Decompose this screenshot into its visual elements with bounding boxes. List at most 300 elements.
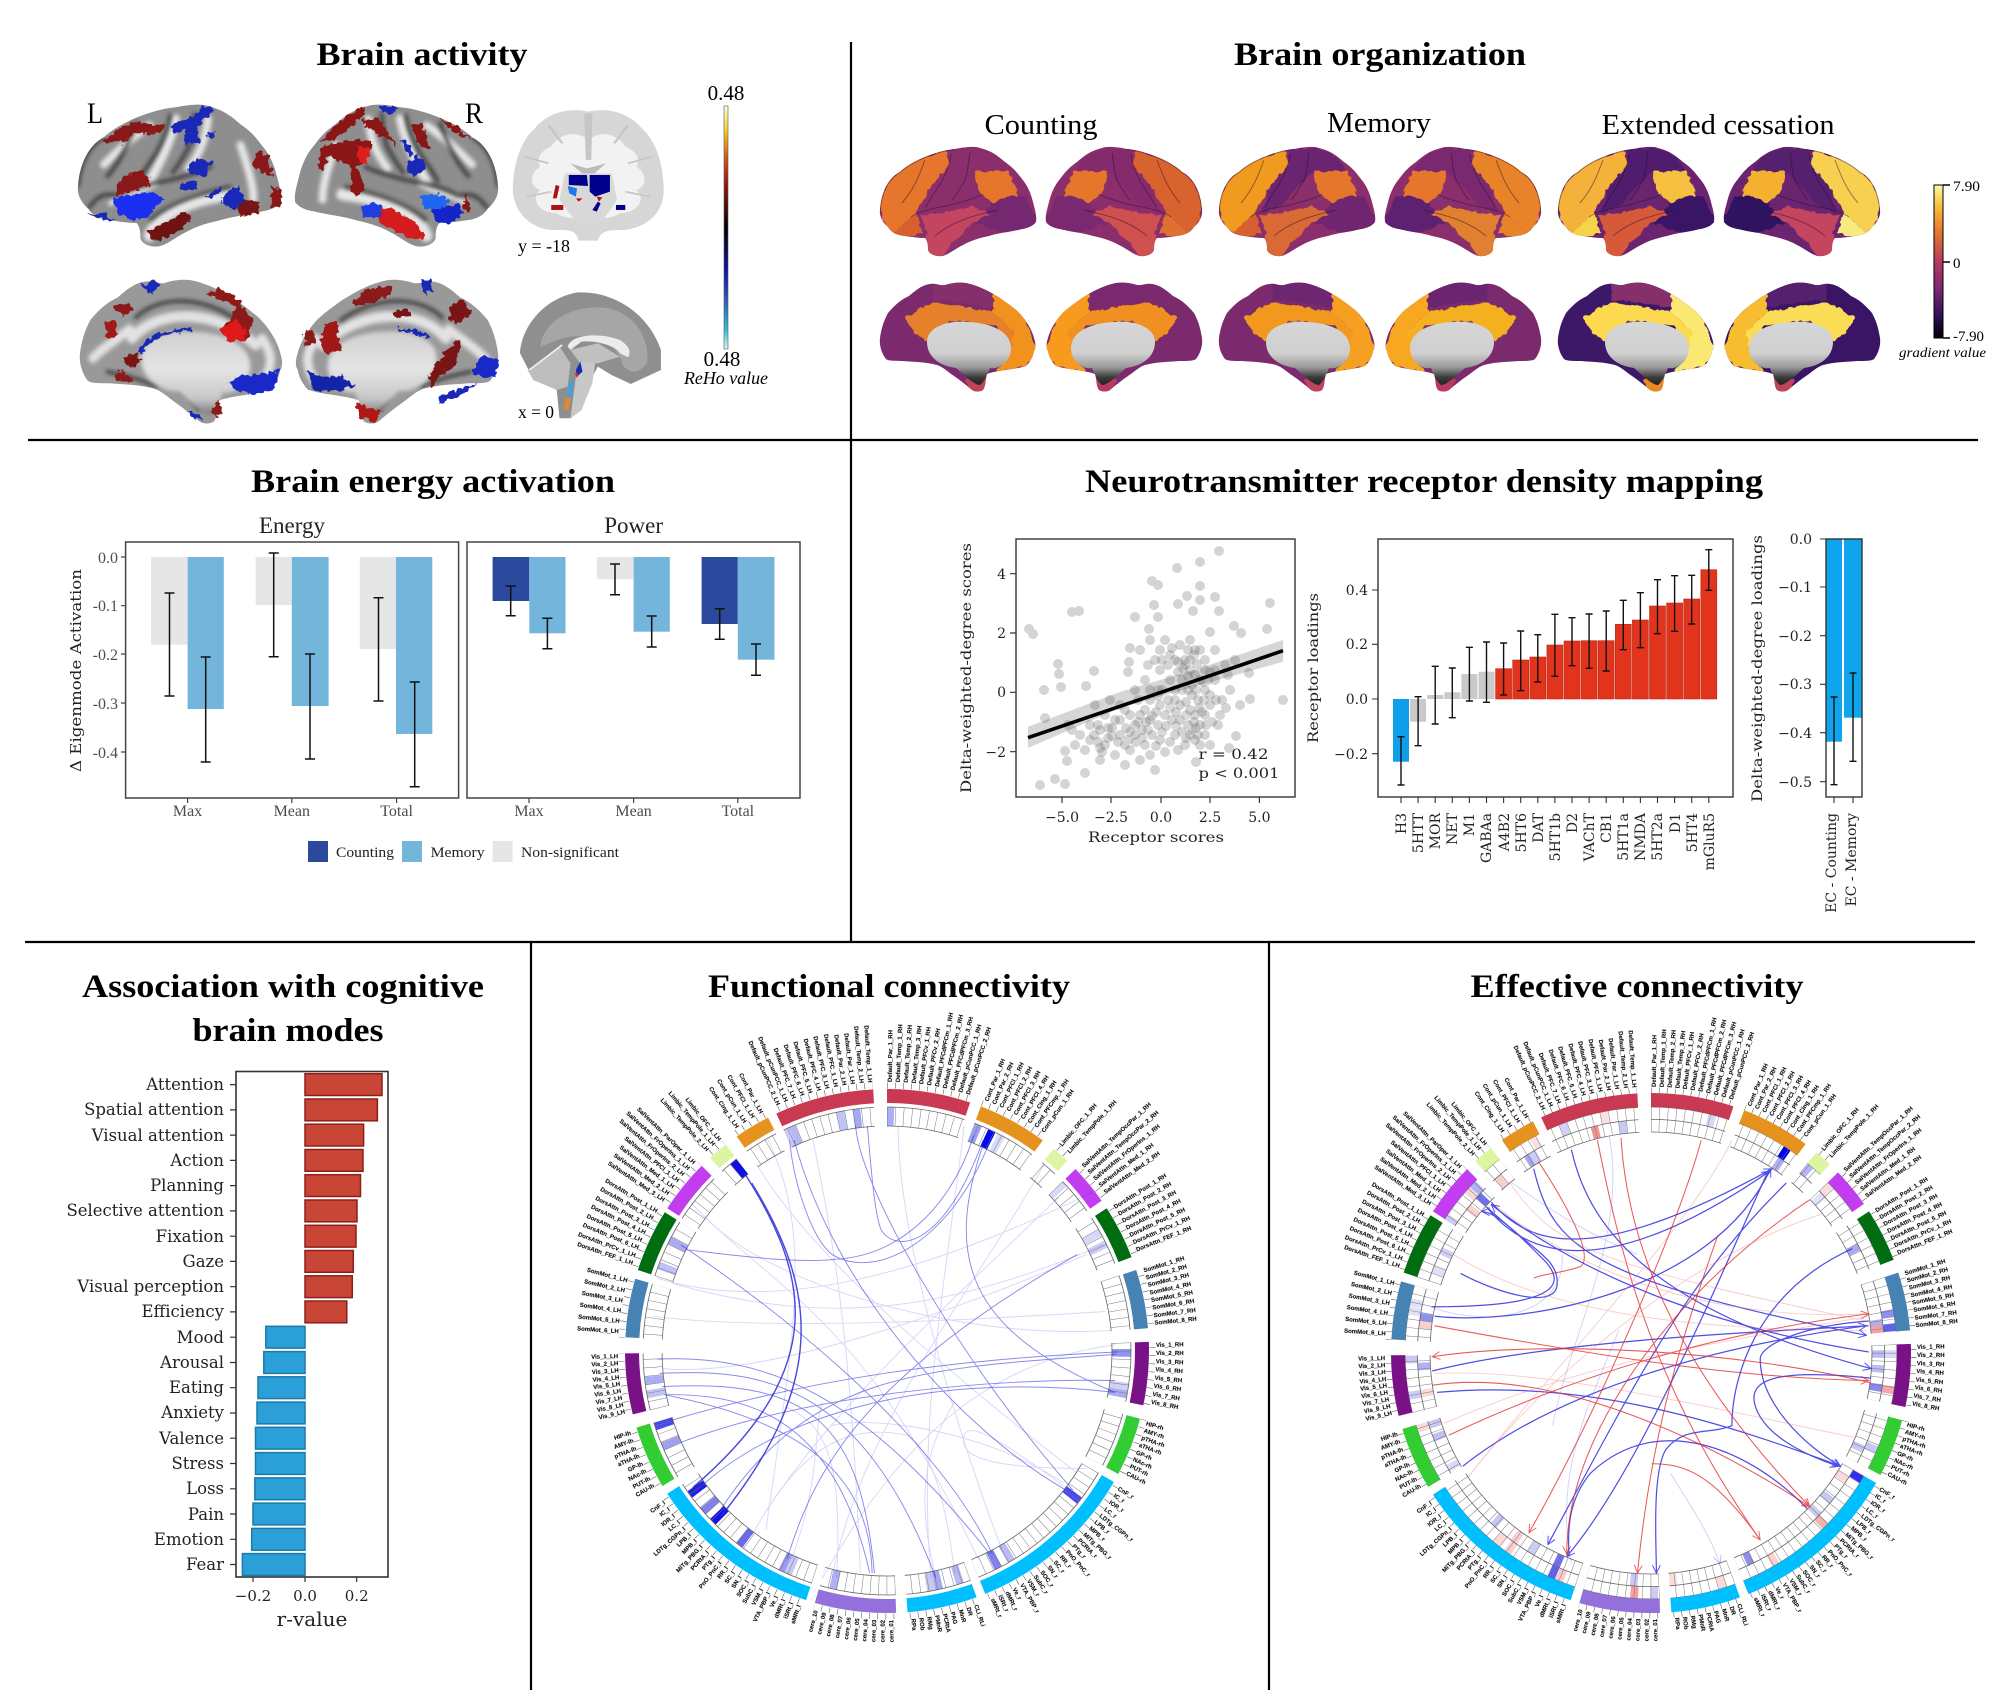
node labels right: PCRtA_r [1838,1538,1860,1560]
node labels left: Default_PFC_1_LH [822,1034,838,1088]
node labels left: Limbic_OFC_1_LH [1449,1102,1487,1147]
node labels left [576,1025,896,1642]
node labels left: iSRt_l [784,1601,795,1620]
node labels left: cere_05 [853,1618,861,1641]
node labels right: SalVentAttn_FrOperIns_1_RH [1854,1128,1923,1186]
node labels left: Cont_PFCl_1_LH [726,1074,755,1120]
node labels left: SOC_l [736,1580,751,1598]
legend: Memory [431,845,485,861]
node labels right: VSM_r [1025,1579,1040,1598]
node labels right: SomMot_3_RH [1147,1273,1190,1289]
node labels right: SomMot_4_RH [1149,1282,1192,1297]
chart: scatter plot: Delta-weighted-degree scores [959,543,975,793]
node labels left: Default_PFC_5_LH [1556,1046,1577,1099]
node labels left: NAc-lh [1395,1469,1415,1483]
node labels right: Vis_6_RH [1914,1385,1942,1395]
chart: receptor loadings bars: DAT [1531,812,1547,843]
node labels left: SomMot_6_LH [1344,1329,1386,1337]
node labels right: PUT-rh [1890,1465,1910,1479]
chart: receptor loadings bars: M1 [1462,813,1478,836]
node labels left: LDTg_CGPn_l [1419,1526,1454,1558]
node labels left: SalVentAttn_Med_2_LH [612,1153,670,1197]
node labels right: Vis_7_RH [1913,1393,1941,1404]
chart: energy: -0.2 [93,647,118,664]
chart: delta-weighted-degree loadings: EC - Memory [1844,813,1860,906]
node labels right: SalVentAttn_Med_1_RH [1860,1147,1917,1193]
node labels right: NAc-rh [1893,1458,1914,1472]
node labels left: Default_PFC_1_LH [1587,1039,1603,1093]
node labels left: SalVentAttn_ParOper_1_LH [635,1107,696,1166]
node labels right: AMY-rh [1904,1430,1926,1442]
node labels right: RR_r [1058,1555,1072,1570]
node labels left: DorsAttn_Post_5_LH [1352,1217,1409,1247]
chart: delta-weighted-degree loadings: −0.1 [1778,580,1812,596]
chart: scatter plot: 2.5 [1199,810,1221,826]
chart: r-value bars: Gaze [183,1252,224,1271]
node labels right: Vis_8_RH [1150,1400,1179,1411]
label: Extended cessation: Extended cessation [1602,110,1834,141]
chart: power: Mean [615,803,652,820]
node labels left: SC_l [1490,1570,1503,1585]
chart: receptor loadings bars: 0.2 [1346,637,1368,653]
node labels right: SalVentAttn_TempOccPar_1_RH [1843,1106,1915,1173]
panel: functional connectivity [526,969,1248,1696]
chart: energy: 0.0 [98,550,118,567]
node labels right: Default_pCunPCC_1_RH [958,1024,983,1093]
node labels right: Vis_3_RH [1156,1359,1183,1366]
chart: energy: -0.4 [93,745,118,762]
node labels right: aTHA-rh [1899,1444,1924,1458]
node labels right: Default_Temp_2_RH [1667,1030,1678,1088]
node labels right: SomMot_2_RH [1906,1267,1949,1284]
node labels left: SalVentAttn_Med_1_LH [1384,1149,1441,1194]
node labels right: SomMot_4_RH [1910,1284,1953,1299]
chart: receptor loadings bars [1306,539,1733,870]
chart: r-value bars [66,1072,388,1631]
chart: r-value bars: Arousal [159,1353,224,1372]
node labels right: Default_PFCv_2_RH [1691,1033,1706,1091]
node labels right: Cont_PFCl_4_RH [1783,1079,1813,1125]
node labels left: Cont_pCun_1_LH [715,1079,747,1124]
node labels left: SalVentAttn_Med_1_LH [618,1145,675,1190]
node labels right: Default_PFCv_2_RH [927,1028,942,1086]
node labels left: cere_06 [1608,1615,1618,1639]
node labels right [1652,1017,1958,1633]
node labels left: cere_01 [1653,1618,1660,1641]
chart: scatter plot: 2 [997,626,1006,642]
node labels left: aTHA-lh [617,1454,641,1468]
node labels left: SomMot_2_LH [1350,1282,1392,1297]
node labels left: Default_PFC_5_LH [791,1041,813,1094]
chart: receptor loadings bars: CB1 [1599,813,1615,843]
chart: r-value bars: Valence [158,1429,224,1448]
node labels right: SomMot_6_RH [1152,1299,1195,1311]
node labels left: Cont_Cing_1_LH [707,1086,739,1130]
node labels left: Default_Temp_1_LH [862,1025,872,1083]
node labels right: SN_r [1045,1565,1059,1580]
node labels right: SubC_r [1794,1574,1811,1596]
chart: r-value bars: Spatial attention [84,1100,224,1119]
chart: r-value bars: 0.2 [345,1587,369,1605]
node labels left: MiTg_PBG_l [676,1544,705,1574]
node labels right: Default_Par_1_RH [1652,1035,1658,1087]
node labels right: LDTg_CGPn_r [1859,1514,1896,1544]
node labels right: PAG [949,1611,958,1625]
node labels left: VSM_l [751,1588,765,1607]
chart: receptor loadings bars: 5HT1a [1616,813,1632,861]
node labels right: Cont_Par_1_RH [985,1058,1007,1103]
node labels right: RPa [909,1619,916,1631]
chart: r-value bars: Fear [186,1555,224,1574]
node labels left: HIP-lh [614,1431,632,1442]
node labels right: RMg [925,1616,933,1630]
node labels left: SubC_l [1508,1583,1523,1604]
colorbar: ReHo: 0.48 [704,347,740,371]
node labels left: pTHA-lh [1381,1447,1405,1461]
node labels right: GP-rh [1135,1450,1153,1462]
node labels right: DorsAttn_Post_4_RH [1125,1199,1182,1232]
node labels left: LC_l [1434,1520,1448,1533]
chart: r-value bars: Visual attention [91,1126,224,1145]
chart: energy: -0.3 [93,696,118,713]
node labels left: RR_l [717,1565,730,1580]
node labels right: PnO_PnC_r [1064,1550,1091,1579]
node labels right: CLi_RLi [972,1604,985,1628]
node labels left: Vis_8_LH [597,1403,624,1414]
node labels right: AMY-rh [1143,1429,1165,1441]
node labels left: Default_Par_1_LH [1607,1038,1619,1090]
node labels right: dMRt_r [1003,1591,1018,1613]
node labels left: Vis_1_LH [1358,1356,1385,1363]
chart: scatter plot: −2 [985,745,1006,761]
node labels left: HIP-lh [1380,1432,1399,1443]
legend [308,841,620,862]
heading: brain organization: Brain organization [1234,37,1526,73]
node labels left: DorsAttn_Post_4_LH [1356,1208,1413,1240]
chart: r-value bars: Stress [171,1454,224,1473]
node labels right: SomMot_5_RH [1151,1290,1193,1304]
node labels right: Cont_Par_2_RH [1755,1066,1778,1110]
chart: r-value bars: 0.0 [293,1587,317,1605]
colorbar: ReHo [683,81,768,388]
node labels left: IC_l [1425,1507,1438,1519]
colorbar: ReHo: 0.48 [708,81,744,105]
node labels right: Default_pCunPCC_1_RH [1721,1029,1747,1098]
colorbar: gradient value: 0 [1953,256,1960,272]
node labels left: Limbic_TempPole_2_LH [659,1098,709,1153]
node labels right: MPB_r [1087,1526,1106,1543]
node labels right: MnR [1720,1608,1730,1623]
node labels right: Cont_PFCl_4_RH [1021,1075,1051,1121]
node labels left: GP-lh [627,1461,645,1474]
node labels right: DorsAttn_Post_3_RH [1883,1193,1939,1228]
node labels right: LDTg_CGPn_r [1098,1514,1134,1544]
node labels right: LPB_r [1854,1520,1872,1536]
node labels right: Default_PFCdPFCm_1_RH [1698,1017,1718,1092]
node labels left: cere_05 [1617,1617,1626,1640]
chart: delta-weighted-degree loadings: −0.4 [1778,726,1812,742]
label: R: R [465,97,483,130]
node labels left: SomMot_5_LH [1345,1317,1387,1327]
chart: r-value bars: Pain [188,1505,224,1524]
node labels right: DorsAttn_Post_2_RH [1879,1185,1934,1221]
colorbar: gradient value [1899,179,1986,361]
node labels left: Cont_Par_1_LH [1502,1077,1529,1120]
chart: r-value bars: Efficiency [141,1302,225,1321]
node labels right: DorsAttn_PrCv_1_RH [1894,1219,1952,1249]
node labels right: SomMot_2_RH [1145,1264,1188,1282]
chart: power: Total [721,803,755,820]
chart: energy: -0.1 [93,598,118,615]
chart: power [467,513,800,820]
node labels left: Vis_9_LH [1365,1411,1393,1423]
chart: receptor loadings bars: D1 [1668,813,1684,833]
node labels right: dMRt_r [1766,1590,1781,1612]
cell ring [555,1019,1219,1683]
node labels right: pTHA-rh [1902,1437,1926,1450]
chart: receptor loadings bars: 5HTT [1411,812,1427,853]
node labels right: Ve_r [1011,1587,1022,1602]
node labels right: VTA_PBP_r [1781,1582,1802,1614]
brain: left medial [77,276,285,424]
node labels left: CnF_l [1416,1501,1433,1515]
node labels right: IOR_r [1108,1500,1125,1515]
node labels right: LPB_r [1093,1520,1111,1536]
node labels right: SN_r [1808,1564,1821,1580]
legend: Non-significant [521,845,620,861]
node labels right: SalVentAttn_Med_1_RH [1098,1143,1155,1189]
chart: delta-weighted-degree loadings: −0.5 [1778,775,1812,791]
node labels left: Default_PFC_7_LH [772,1048,796,1100]
node labels left: LPB_l [676,1532,693,1549]
node labels right: pTHA-rh [1140,1436,1165,1449]
node labels left: cere_02 [1644,1618,1651,1641]
node labels left: Vis_5_LH [593,1382,620,1391]
heading: brain activity: Brain activity [316,37,528,73]
node labels left: dMRt_l [774,1598,787,1619]
node labels right: Ve_r [1773,1586,1785,1601]
chart: delta-weighted-degree loadings: Delta-weighted-degree loadings [1750,535,1766,802]
node labels left: DorsAttn_Post_5_LH [585,1214,643,1244]
node labels right: Vis_1_RH [1917,1344,1945,1351]
node labels right: SalVentAttn_Med_2_RH [1865,1155,1923,1199]
node labels left: MPB_l [1447,1538,1465,1556]
chart: r-value bars: −0.2 [235,1587,271,1605]
chart: scatter plot: −2.5 [1094,810,1128,826]
chart: receptor loadings bars: A4B2 [1497,813,1513,852]
node labels left: Cont_pCun_1_LH [1481,1083,1513,1129]
node labels left: Vis_5_LH [1360,1383,1387,1393]
node labels left: aTHA-lh [1384,1454,1408,1469]
brain maps: counting [878,146,1204,394]
chart: receptor loadings bars: 0.0 [1346,692,1368,708]
node labels left: VTA_PBP_l [1518,1591,1538,1623]
node labels left: Default_Temp_2_LH [852,1026,864,1084]
chart: scatter plot: 4 [997,567,1006,583]
node labels right: Cont_PFCl_3_RH [1014,1070,1043,1116]
node labels right: sMRt_r [989,1598,1003,1619]
node labels left: SalVentAttn_Med_3_LH [1373,1165,1432,1207]
chart: receptor loadings bars: D2 [1565,813,1581,833]
node labels right: Vis_3_RH [1917,1361,1944,1368]
node labels left: Default_pCunPCC_1_LH [1521,1041,1553,1108]
legend: Counting [336,845,395,861]
node labels right: Default_Par_1_RH [888,1030,894,1082]
node labels right: MnR [957,1609,966,1624]
node labels right: DorsAttn_Post_5_RH [1129,1207,1186,1239]
node labels right: Default_PFCv_1_RH [1683,1032,1696,1090]
node labels right: Default_PFCdPFCm_3_RH [951,1017,975,1091]
node labels right: DorsAttn_PrCv_1_RH [1132,1216,1191,1246]
node labels right: Vis_5_RH [1154,1376,1182,1384]
node labels right [888,1012,1197,1634]
node labels right: IC_r [1112,1493,1126,1505]
node labels left: SomMot_5_LH [578,1314,620,1325]
chart: scatter plot: 0 [997,685,1006,701]
node labels left: cere_06 [844,1616,853,1640]
node labels left: PUT-lh [1399,1477,1419,1491]
node labels right: Cont_PFCl_3_RH [1776,1075,1805,1121]
node labels right: Limbic_TempPole_1_RH [1829,1104,1880,1159]
node labels left: MiTg_PBG_l [1442,1544,1471,1574]
node labels right: Vis_1_RH [1156,1342,1184,1349]
node labels right: sMRt_r [1752,1597,1765,1619]
chord diagram: functional [526,990,1248,1696]
chart: energy: Max [173,803,202,820]
node labels right: Limbic_TempPole_1_RH [1067,1100,1118,1155]
node labels right: Default_PFCv_1_RH [919,1027,933,1085]
node labels left: Limbic_TempPole_1_LH [667,1091,716,1147]
node labels right: Vis_5_RH [1915,1377,1943,1386]
chart: power: Power [604,513,663,538]
node labels left: cere_02 [880,1619,887,1642]
node labels left: Vis_4_LH [592,1375,620,1384]
node labels left: cere_09 [1582,1611,1593,1634]
heading: neurotransmitter: Neurotransmitter receptor density mapping [1085,464,1764,500]
node labels right: MPB_r [1849,1526,1868,1543]
node labels left: sMRt_l [791,1604,803,1625]
chart: receptor loadings bars: Receptor loadings [1306,593,1322,743]
panel: neurotransmitter receptor density mapping [959,464,1862,913]
node labels left: Default_PFC_6_LH [1547,1049,1569,1102]
node labels right: Default_pCunPCC_2_RH [966,1027,993,1096]
node labels right: DorsAttn_Post_4_RH [1887,1202,1943,1235]
node labels left: Default_pCunPCC_2_LH [1512,1045,1546,1111]
node labels left: cere_07 [1599,1614,1609,1638]
node labels left: DorsAttn_Post_3_LH [1361,1199,1417,1232]
node labels left: SomMot_3_LH [1348,1293,1390,1307]
node labels right: DorsAttn_Post_1_RH [1875,1177,1929,1214]
node labels right: Limbic_OFC_1_RH [1821,1107,1861,1152]
label: x = 0: x = 0 [518,402,554,422]
chart: energy [93,513,459,820]
node labels right: PMnR [1697,1614,1706,1632]
node labels left: Vis_2_LH [1358,1363,1385,1370]
node labels right: PTg_r [1070,1544,1087,1561]
node labels left: Default_Temp_1_LH [1627,1030,1636,1088]
label: Counting: Counting [984,110,1098,141]
node labels right: PCRtA [941,1613,951,1634]
brain: right medial [293,276,501,424]
node labels left: Default_PFC_4_LH [1566,1043,1586,1097]
node labels left: Limbic_TempPole_1_LH [1433,1095,1482,1152]
node labels right: MiTg_PBG_r [1082,1532,1113,1562]
chart: scatter plot [959,539,1295,846]
node labels left: SubC_l [742,1584,758,1605]
node labels left: Vis_7_LH [595,1396,623,1406]
colorbar: gradient value: gradient value [1899,346,1986,361]
node labels right: SomMot_7_RH [1153,1308,1196,1319]
node labels left: Default_pCunPCC_1_LH [756,1036,788,1103]
node labels left: Vis_1_LH [591,1354,618,1361]
node labels left: Default_PFC_7_LH [1537,1052,1561,1105]
colorbar: gradient value: -7.90 [1953,329,1984,345]
node labels right: SOC_r [1038,1570,1054,1589]
node labels left: Default_Par_2_LH [832,1034,846,1086]
node labels right: ROb [917,1618,925,1631]
node labels right: Cont_PFCl_1_RH [999,1062,1026,1109]
node labels right: SalVentAttn_TempOccPar_2_RH [1849,1114,1922,1180]
node labels left: DorsAttn_Post_2_LH [599,1187,654,1222]
node labels right: CLi_RLi [1735,1603,1748,1627]
chart: delta-weighted-degree loadings: −0.2 [1778,629,1812,645]
node labels right: SalVentAttn_Med_2_RH [1103,1151,1161,1196]
node labels right: Limbic_OFC_1_RH [1059,1103,1099,1148]
chart: r-value bars: r-value [277,1607,347,1631]
node labels left: VTA_PBP_l [753,1591,772,1623]
node labels right: ROb [1681,1617,1688,1630]
node labels right: PnO_PnC_r [1826,1549,1853,1579]
node labels left: SalVentAttn_ParOper_1_LH [1401,1111,1462,1170]
node labels left: CnF_l [650,1500,667,1515]
chart: energy: Energy [259,513,325,538]
node labels left: SomMot_6_LH [577,1326,619,1335]
node labels right: Default_PFCdPFCm_1_RH [935,1012,955,1087]
label: y = -18: y = -18 [518,236,570,256]
chart: r-value bars: Planning [150,1176,224,1195]
colorbar: gradient value: 7.90 [1953,179,1980,195]
colour bands [1293,995,2000,1696]
node labels right: Cont_PFCl_2_RH [1006,1066,1034,1113]
node labels left: MPB_l [681,1539,699,1556]
node labels left: cere_08 [1591,1612,1601,1636]
chord diagram: effective [1293,995,2000,1696]
chart: delta-weighted-degree loadings: 0.0 [1790,532,1812,548]
node labels left: Vis_3_LH [592,1368,619,1376]
node labels left: AMY-lh [1380,1439,1402,1452]
node labels left: SomMot_2_LH [583,1279,625,1294]
node labels right: SalVentAttn_TempOccPar_2_RH [1087,1110,1160,1176]
heading: association: brain modes [192,1013,384,1049]
node labels left: SomMot_1_LH [1353,1270,1395,1287]
heading: brain energy activation: Brain energy activation [251,464,615,500]
node labels left: Vis_6_LH [594,1389,622,1399]
node labels right: Vis_4_RH [1155,1367,1183,1375]
node labels left: SalVentAttn_PFCl_1_LH [623,1136,680,1184]
node labels left: Ve_l [770,1595,780,1609]
node labels right: DR [965,1607,973,1617]
chart: power: Max [514,803,544,820]
node labels left: SN_l [1497,1574,1509,1589]
chart: receptor loadings bars: 5HT1b [1548,813,1564,861]
chart: energy: Total [380,803,413,820]
node labels right: SomMot_8_RH [1154,1317,1197,1327]
node labels left: Limbic_TempPole_2_LH [1425,1102,1475,1157]
node labels right: DorsAttn_Post_2_RH [1117,1182,1173,1217]
node labels left: DorsAttn_FEF_1_LH [576,1242,633,1267]
node labels right: Cont_Cing_1_RH [1027,1080,1059,1125]
node labels right: NAc-rh [1132,1457,1153,1471]
